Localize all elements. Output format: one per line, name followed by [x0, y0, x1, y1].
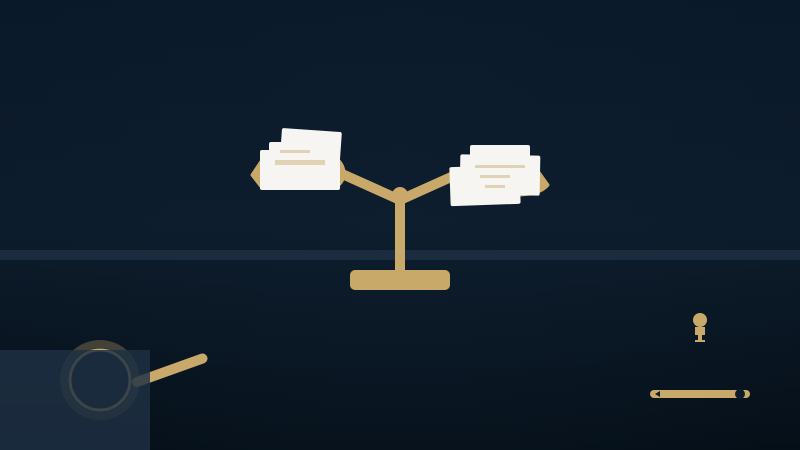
middle document	[269, 142, 329, 182]
magnifier outer ring	[64, 344, 136, 416]
scale base	[350, 270, 450, 290]
balance scale	[252, 158, 548, 290]
magnifier handle	[137, 358, 202, 382]
scale beam	[340, 173, 460, 200]
left document stack	[260, 128, 342, 190]
right document stack	[449, 145, 540, 206]
scale post	[395, 195, 405, 275]
front document	[260, 150, 340, 190]
front document	[449, 165, 521, 206]
back document	[470, 145, 530, 185]
icon: key figure	[693, 313, 707, 342]
document lines	[475, 165, 525, 168]
horizon band	[0, 250, 800, 260]
back document	[278, 128, 342, 188]
left pan	[252, 158, 344, 188]
magnifying glass	[64, 344, 202, 416]
right pan	[470, 170, 548, 200]
document lines	[280, 150, 310, 153]
middle document	[460, 154, 540, 196]
icon: pencil bar	[650, 389, 750, 399]
corner panel	[0, 350, 150, 450]
magnifier inner ring	[70, 350, 130, 410]
scale pivot	[392, 187, 408, 203]
